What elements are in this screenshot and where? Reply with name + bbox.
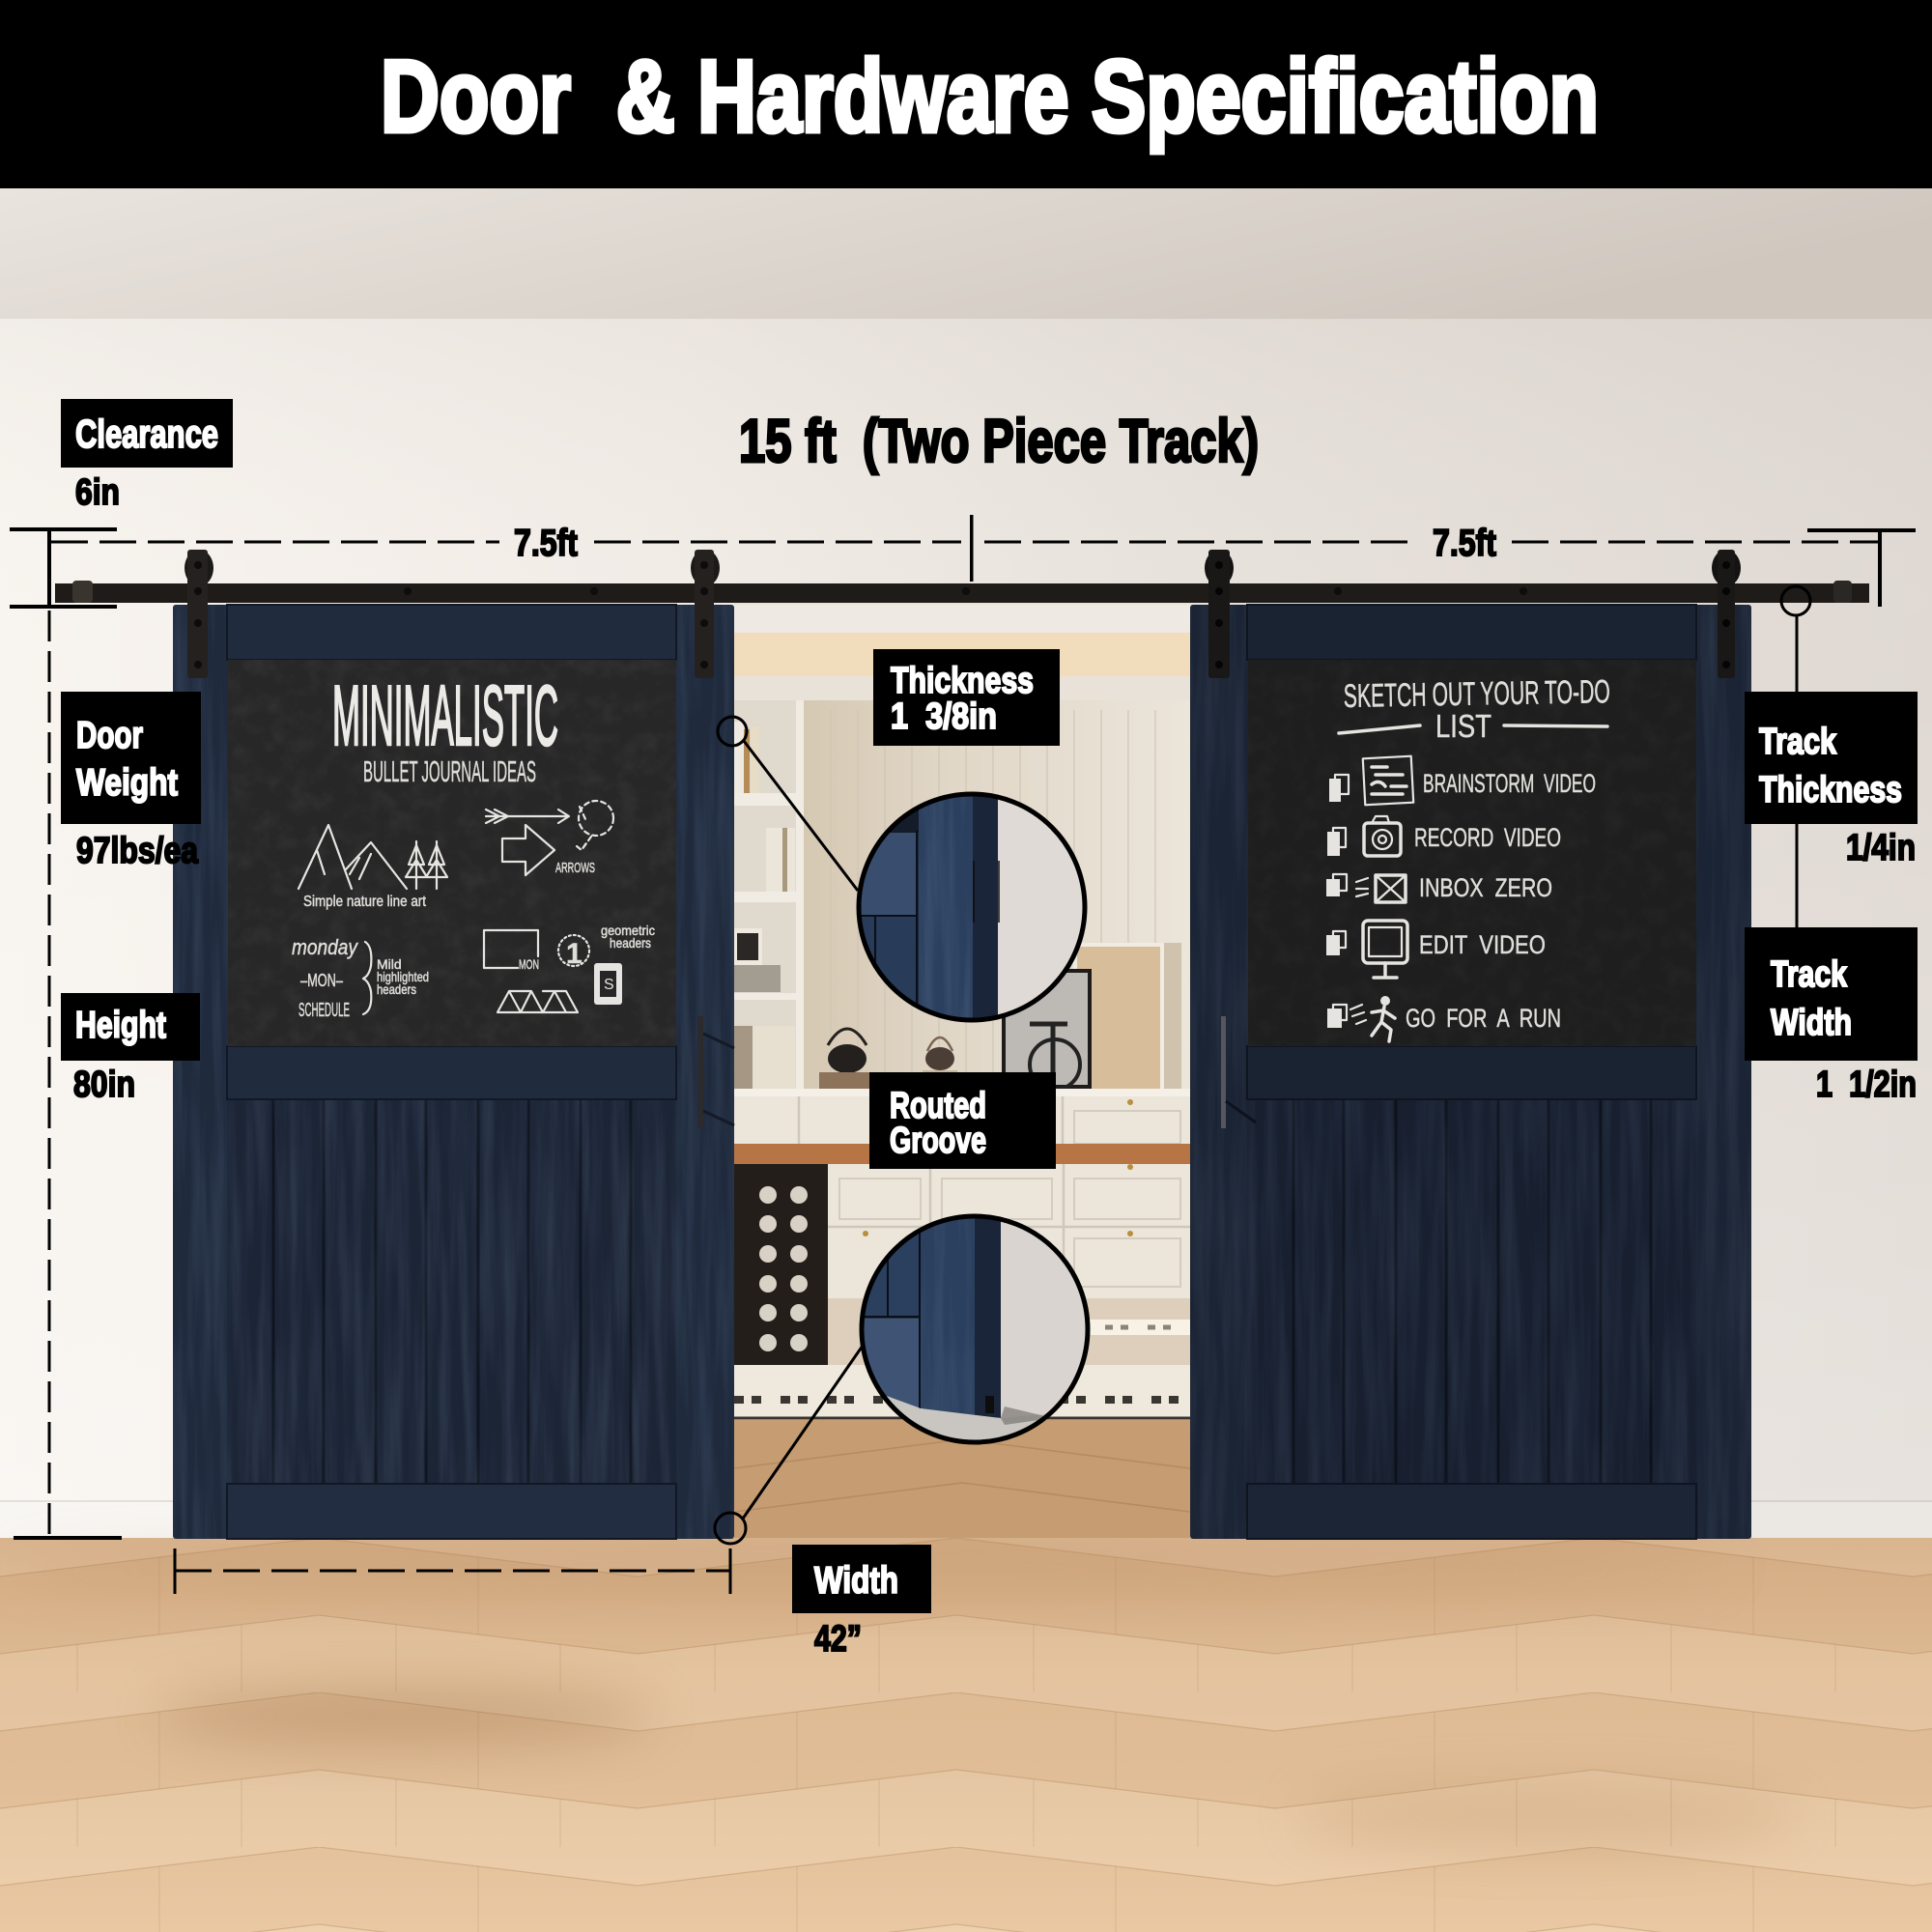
teapots bbox=[819, 1029, 957, 1089]
label: track width bbox=[1745, 927, 1918, 1061]
chalk heading: SKETCH OUT YOUR TO-DO bbox=[1343, 673, 1610, 715]
chalk nature caption: Simple nature line art bbox=[303, 894, 426, 910]
clearance bracket left bbox=[10, 529, 117, 607]
chalk arrows bbox=[486, 801, 613, 875]
left door pull handle bbox=[697, 1016, 734, 1128]
to-do row: record: RECORD VIDEO bbox=[1414, 823, 1561, 852]
groove pointer bbox=[715, 1346, 863, 1544]
label: door weight: Weight bbox=[76, 762, 178, 804]
chalk mon: –MON– bbox=[300, 971, 343, 990]
to-do row: brainstorm bbox=[1329, 756, 1596, 805]
chalk geometric headers: geometric bbox=[601, 923, 655, 938]
chalk brace bbox=[363, 942, 371, 1014]
value: track thickness: 1/4in bbox=[1846, 828, 1916, 868]
hanger strap 3 bbox=[1205, 550, 1234, 678]
right chalkboard bbox=[1248, 660, 1696, 1046]
chalk list word: LIST bbox=[1435, 708, 1492, 744]
chalk mild highlighted headers: Mild bbox=[377, 956, 402, 972]
to-do row: inbox: INBOX ZERO bbox=[1419, 873, 1552, 902]
hanger strap 4 bbox=[1712, 550, 1741, 678]
chalk geometric headers: headers bbox=[610, 935, 651, 951]
label: track thickness bbox=[1745, 692, 1918, 824]
height dimension line bbox=[14, 611, 122, 1538]
label: track width: Track bbox=[1771, 954, 1848, 995]
cabinets bbox=[734, 1089, 1190, 1298]
center tick bbox=[970, 515, 974, 582]
label: clearance bbox=[61, 399, 233, 468]
left door planks bbox=[227, 1099, 676, 1484]
wooden countertop bbox=[734, 1144, 1190, 1164]
label: routed groove: Routed bbox=[890, 1086, 986, 1126]
label: width bbox=[792, 1545, 931, 1613]
chalk arrows caption: ARROWS bbox=[555, 860, 595, 876]
title: Door & Hardware Specification bbox=[381, 40, 1599, 154]
width dimension line bbox=[175, 1548, 730, 1594]
label: thickness: Thickness bbox=[891, 661, 1034, 701]
label: thickness: 1 3/8in bbox=[891, 696, 997, 737]
left shelves bbox=[734, 700, 804, 1096]
left barn door bbox=[173, 605, 734, 1539]
framed art bbox=[1002, 943, 1181, 1090]
track length heading: 15 ft (Two Piece Track) bbox=[739, 408, 1259, 475]
to-do row: run bbox=[1327, 996, 1561, 1041]
to-do row: edit bbox=[1326, 921, 1546, 978]
baseboards bbox=[0, 1500, 1932, 1538]
left chalkboard: MINIMALISTIC bbox=[332, 668, 558, 763]
label: door weight bbox=[61, 692, 201, 824]
thickness pointer bbox=[718, 717, 858, 891]
to-do row: record bbox=[1327, 816, 1561, 856]
label: width: Width bbox=[814, 1560, 898, 1602]
value: clearance: 6in bbox=[75, 472, 120, 513]
right door planks bbox=[1247, 1099, 1696, 1484]
herringbone wood floor bbox=[0, 1538, 1932, 1932]
chalk mild highlighted headers: highlighted bbox=[377, 969, 429, 984]
rug and room floor bbox=[734, 1298, 1190, 1538]
label: height: Height bbox=[75, 1005, 166, 1046]
to-do row: edit: EDIT VIDEO bbox=[1419, 930, 1546, 959]
routed groove detail lens bbox=[860, 1212, 1092, 1449]
label: door weight: Door bbox=[76, 715, 143, 756]
dimension: left 7.5ft: 7.5ft bbox=[514, 523, 578, 564]
left chalkboard: SCHEDULE bbox=[298, 1000, 350, 1021]
chalk monday: monday bbox=[292, 935, 359, 959]
beadboard back wall bbox=[803, 700, 1190, 1089]
label: clearance: Clearance bbox=[75, 412, 218, 456]
chalk mild highlighted headers: headers bbox=[377, 981, 416, 997]
thickness detail lens bbox=[855, 792, 1090, 1024]
label: routed groove: Groove bbox=[890, 1121, 986, 1161]
label: routed groove bbox=[869, 1072, 1056, 1169]
label: thickness bbox=[873, 649, 1060, 746]
hanger strap 1 bbox=[185, 550, 213, 678]
hanger strap 2 bbox=[691, 550, 720, 678]
sliding track bbox=[55, 581, 1869, 603]
label: height bbox=[61, 993, 200, 1061]
chalk geometric headers bbox=[484, 923, 655, 1012]
header bar bbox=[0, 0, 1932, 188]
value: height: 80in bbox=[73, 1065, 135, 1105]
to-do row: inbox bbox=[1326, 873, 1552, 902]
left chalkboard bbox=[228, 660, 676, 1046]
wall bbox=[0, 319, 1932, 1538]
to-do row: run: GO FOR A RUN bbox=[1406, 1004, 1561, 1033]
left chalkboard: BULLET JOURNAL IDEAS bbox=[363, 754, 536, 788]
perforated black desk panel bbox=[734, 1164, 828, 1365]
room seen through the opening bbox=[734, 603, 1190, 1538]
dimension: right 7.5ft: 7.5ft bbox=[1433, 523, 1496, 564]
chalk mountains bbox=[298, 825, 447, 889]
track callout line bbox=[1781, 586, 1810, 927]
value: width: 42” bbox=[814, 1619, 862, 1660]
chalk geometric headers: MON bbox=[519, 956, 539, 972]
chalk underlines bbox=[1339, 725, 1607, 733]
to-do row: brainstorm: BRAINSTORM VIDEO bbox=[1423, 769, 1596, 798]
label: track thickness: Track bbox=[1759, 722, 1837, 762]
chalk geometric headers: S bbox=[604, 977, 614, 993]
ceiling band bbox=[0, 188, 1932, 319]
value: door weight: 97lbs/ea bbox=[76, 831, 199, 871]
clearance bracket right bbox=[1807, 530, 1916, 607]
right door pull handle bbox=[1221, 1016, 1256, 1128]
right barn door bbox=[1190, 605, 1751, 1539]
chalk mild highlighted headers bbox=[377, 956, 429, 997]
chalk geometric headers: 1 bbox=[566, 938, 582, 970]
label: track width: Width bbox=[1771, 1003, 1852, 1043]
